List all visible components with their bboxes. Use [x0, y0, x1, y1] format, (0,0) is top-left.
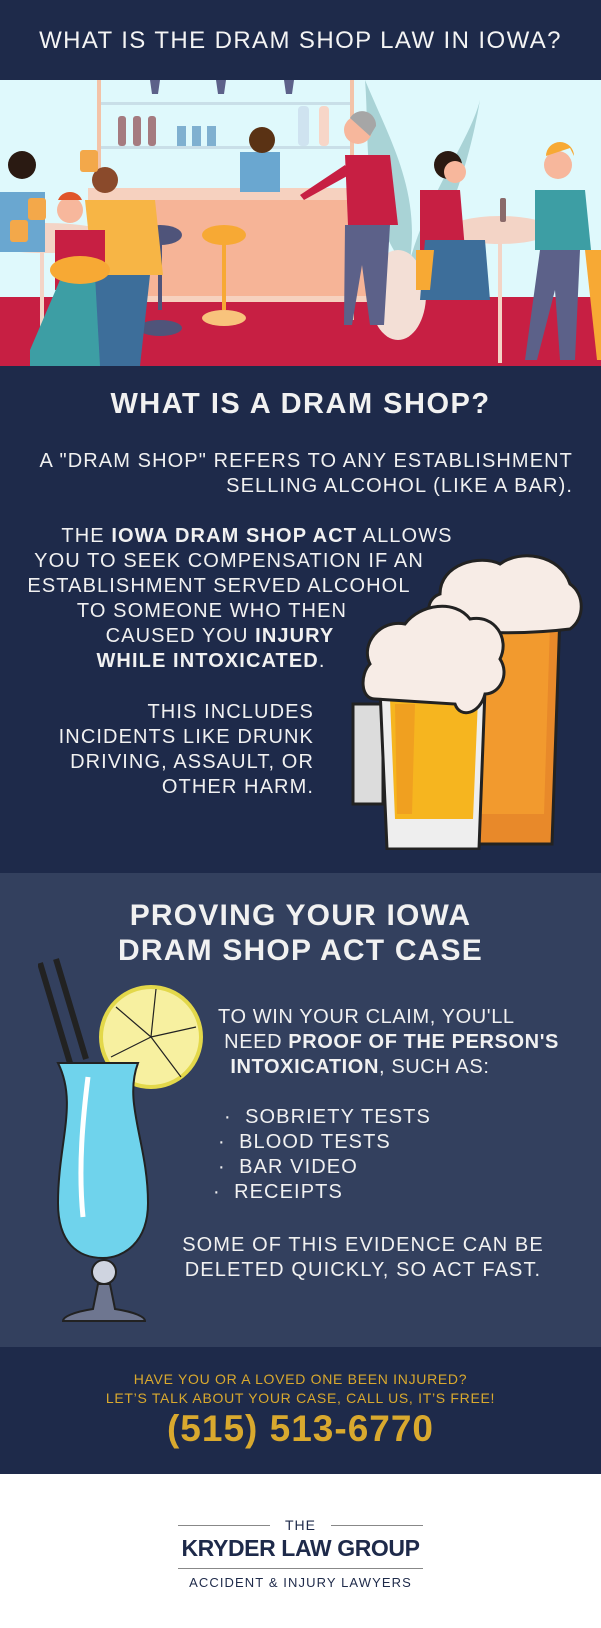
bar counter	[88, 188, 368, 300]
panel: what is a dram shop	[0, 366, 601, 873]
text: act description: THE IOWA DRAM SHOP ACT ALLOWS	[61, 525, 453, 547]
text: act description: YOU TO SEEK COMPENSATION IF AN	[34, 550, 424, 572]
text: act fast: DELETED QUICKLY, SO ACT FAST.	[185, 1259, 541, 1281]
text: act description: TO SOMEONE WHO THEN	[77, 600, 347, 622]
logo: ACCIDENT & INJURY LAWYERS	[189, 1575, 412, 1590]
list: evidence: · BAR VIDEO	[218, 1156, 358, 1178]
logo: KRYDER LAW GROUP	[181, 1535, 420, 1561]
phone number: (515) 513-6770	[167, 1408, 434, 1449]
panel: proving your case	[0, 873, 601, 1347]
text: includes: OTHER HARM.	[162, 776, 314, 798]
text: definition: SELLING ALCOHOL (LIKE A BAR).	[226, 475, 573, 497]
text: includes	[59, 701, 314, 798]
title: WHAT IS THE DRAM SHOP LAW IN IOWA?	[39, 27, 562, 54]
list: evidence: · SOBRIETY TESTS	[224, 1106, 431, 1128]
text: act description: ESTABLISHMENT SERVED ALCOHOL	[27, 575, 411, 597]
shelves	[97, 80, 354, 320]
logo	[178, 1517, 423, 1590]
right table group	[448, 216, 552, 244]
text: proof needed	[218, 1006, 559, 1078]
text: act fast: SOME OF THIS EVIDENCE CAN BE	[182, 1234, 544, 1256]
stool	[202, 225, 246, 245]
text: act fast	[182, 1234, 544, 1281]
text: includes: INCIDENTS LIKE DRUNK	[59, 726, 314, 748]
text: cta: HAVE YOU OR A LOVED ONE BEEN INJURED?	[134, 1371, 467, 1387]
text: includes: THIS INCLUDES	[147, 701, 314, 723]
text: proof needed: TO WIN YOUR CLAIM, YOU'LL	[218, 1006, 515, 1028]
heading: DRAM SHOP ACT CASE	[118, 934, 483, 967]
panel: call to action	[0, 1347, 601, 1474]
icon: cocktail glass	[38, 958, 203, 1322]
text: act description: WHILE INTOXICATED.	[96, 650, 326, 672]
list: evidence: · BLOOD TESTS	[218, 1131, 391, 1153]
text: includes: DRIVING, ASSAULT, OR	[70, 751, 314, 773]
bartender	[240, 152, 280, 192]
text: act description: CAUSED YOU INJURY	[106, 625, 334, 647]
text: proof needed: NEED PROOF OF THE PERSON'S	[224, 1031, 559, 1053]
plant	[365, 80, 480, 270]
text: cta	[106, 1371, 495, 1406]
heading	[118, 899, 483, 967]
text: definition: A "DRAM SHOP" REFERS TO ANY ESTABLISHMENT	[40, 450, 573, 472]
heading: PROVING YOUR IOWA	[130, 899, 471, 932]
man in red	[345, 155, 398, 225]
heading: WHAT IS A DRAM SHOP?	[110, 388, 491, 420]
text: cta: LET’S TALK ABOUT YOUR CASE, CALL US, IT’S FREE!	[106, 1390, 495, 1406]
header: title bar	[0, 0, 601, 80]
illustration: bar scene	[0, 80, 601, 366]
list: evidence: · RECEIPTS	[213, 1181, 343, 1203]
text: definition	[40, 450, 573, 497]
icon: beer mugs	[352, 554, 583, 850]
list: evidence	[213, 1106, 431, 1203]
text: proof needed: INTOXICATION, SUCH AS:	[230, 1056, 490, 1078]
text: act description	[27, 525, 453, 672]
left table group	[0, 223, 115, 253]
logo: THE	[285, 1517, 316, 1533]
